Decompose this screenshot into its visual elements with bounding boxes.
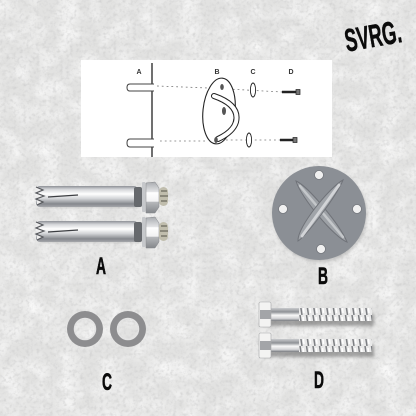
label D: D: [314, 367, 324, 394]
diagram labels A B C D: C: [250, 69, 256, 76]
diagram labels A B C D: D: [288, 69, 294, 76]
diagram labels A B C D: B: [214, 69, 220, 76]
diagram: plate B: [200, 77, 238, 145]
label A: A: [96, 253, 106, 280]
wall line and wall anchors: [127, 63, 154, 157]
diagram labels A B C D: A: [136, 69, 142, 76]
crossed bars: [296, 181, 347, 242]
diagram: washers C: [246, 83, 256, 147]
panel: exploded assembly diagram: [81, 60, 332, 157]
part B: X mount plate: [272, 166, 367, 262]
part D: lag screws: [259, 302, 374, 358]
part A: expansion anchors: [36, 182, 168, 248]
mounting holes: [278, 170, 362, 254]
diagram labels A B C D: [136, 69, 294, 76]
dotted alignment lines: [157, 86, 282, 141]
diagram: screws D: [280, 90, 300, 142]
label C: C: [102, 369, 112, 396]
label B: B: [318, 263, 328, 290]
part C: washers: [67, 311, 146, 347]
